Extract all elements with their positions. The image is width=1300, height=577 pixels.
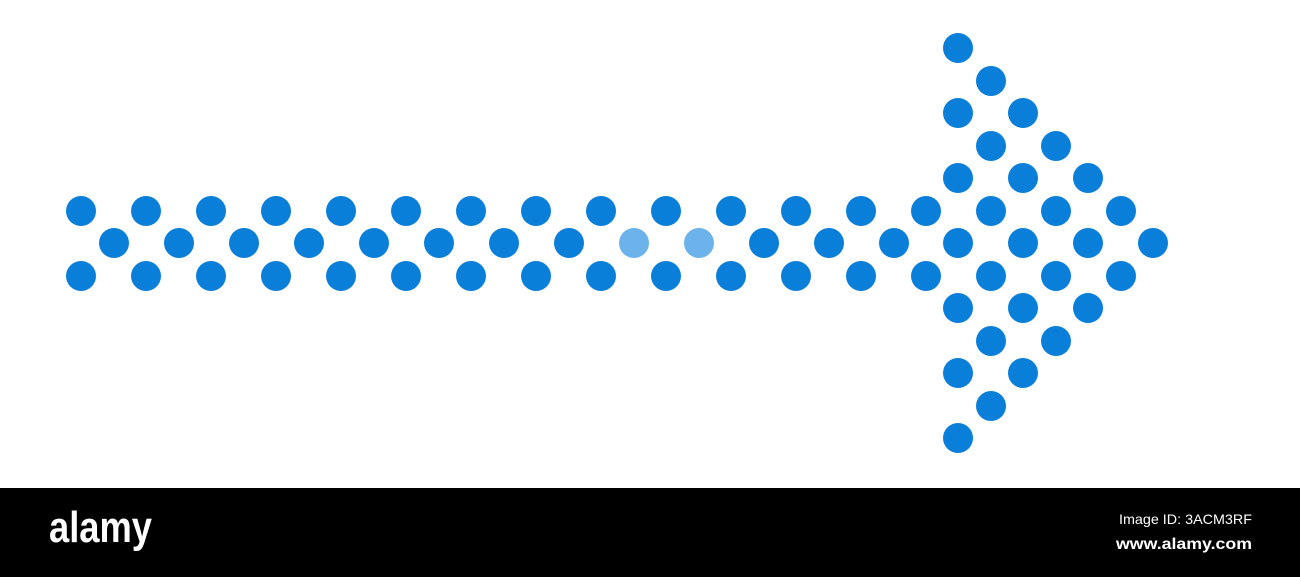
- arrow shaft: middle row: [99, 228, 909, 258]
- arrow shaft: bottom row: [66, 261, 941, 291]
- website text: www.alamy.com: [1115, 536, 1252, 553]
- footer bar: [0, 488, 1300, 577]
- footer logo text: alamy: [49, 503, 152, 552]
- image id text: Image ID: 3ACM3RF: [1119, 511, 1252, 527]
- arrow: dotted right arrow: [66, 33, 1168, 453]
- arrow shaft: top row: [66, 196, 941, 226]
- arrow head: [943, 33, 1168, 453]
